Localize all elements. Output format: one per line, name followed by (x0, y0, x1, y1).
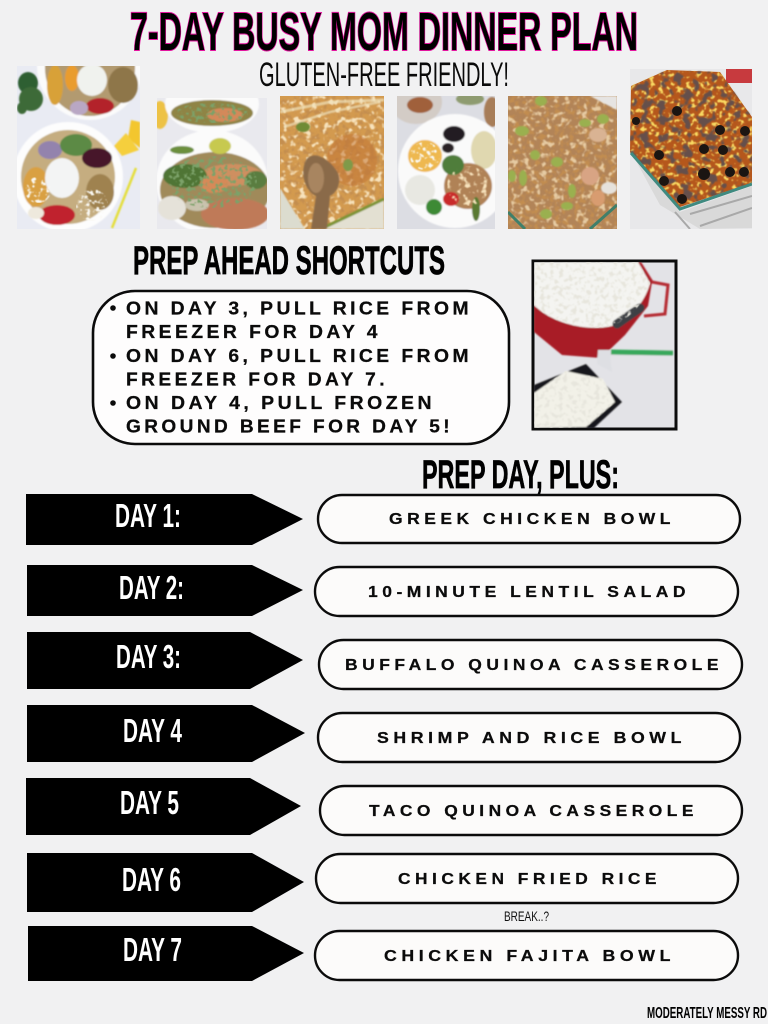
heading: prep day plus: PREP DAY, PLUS: (422, 453, 619, 497)
heading: prep ahead shortcuts: PREP AHEAD SHORTCUTS (133, 239, 445, 283)
arrow: day 4: DAY 4 (123, 712, 182, 749)
arrow: day 5 (26, 778, 301, 835)
note: break: BREAK..? (504, 908, 549, 924)
shortcut: day 4: ON DAY 4, PULL FROZEN (126, 393, 435, 413)
arrow: day 2 (27, 565, 303, 616)
shortcut: day 3: ON DAY 3, PULL RICE FROM (126, 298, 472, 318)
shortcut: day 6 (110, 346, 472, 390)
meal: day 6 (316, 854, 738, 903)
meal: day 3: BUFFALO QUINOA CASSEROLE (345, 657, 723, 674)
meal: day 7 (315, 931, 738, 980)
photo: shrimp and rice bowls (157, 98, 267, 229)
arrow: day 1 (26, 494, 303, 545)
arrow: day 5: DAY 5 (120, 784, 179, 821)
photo: buffalo quinoa casserole (280, 96, 384, 229)
arrow: day 7 (28, 926, 304, 981)
meal: day 4: SHRIMP AND RICE BOWL (377, 730, 686, 747)
photo: Greek chicken bowls (17, 66, 140, 229)
shortcut: day 6: FREEZER FOR DAY 7. (126, 370, 388, 390)
photo: taco quinoa casserole (630, 69, 752, 229)
meal: day 6: CHICKEN FRIED RICE (398, 871, 661, 888)
arrow: day 7: DAY 7 (123, 931, 182, 968)
panel: prep ahead shortcut list (93, 291, 509, 444)
meal: day 5 (320, 786, 742, 835)
meal: day 1 (318, 495, 740, 543)
shortcut: day 6: ON DAY 6, PULL RICE FROM (126, 346, 472, 366)
shortcut: day 3: FREEZER FOR DAY 4 (126, 322, 381, 342)
arrow: day 4 (27, 705, 305, 762)
photo: frozen rice in pot and tray (533, 261, 676, 429)
arrow: day 3: DAY 3: (116, 638, 181, 675)
subtitle: GLUTEN-FREE FRIENDLY! (259, 56, 509, 94)
meal: day 4 (318, 713, 740, 762)
meal: day 2: 10-MINUTE LENTIL SALAD (368, 584, 690, 601)
arrow: day 6 (27, 853, 304, 912)
shortcut: day 4 (110, 393, 453, 436)
meal: day 5: TACO QUINOA CASSEROLE (369, 803, 698, 820)
meal: day 2 (315, 567, 738, 616)
arrow: day 6: DAY 6 (122, 861, 181, 898)
arrow: day 1: DAY 1: (115, 497, 181, 534)
meal: day 1: GREEK CHICKEN BOWL (389, 511, 675, 528)
shortcut: day 3 (110, 298, 472, 342)
meal: day 3 (319, 640, 742, 689)
arrow: day 3 (27, 632, 303, 689)
photo: chicken fried rice (508, 96, 617, 229)
arrow: day 2: DAY 2: (119, 569, 184, 606)
shortcut: day 4: GROUND BEEF FOR DAY 5! (126, 416, 453, 436)
photo: chicken fajita bowl (397, 96, 495, 229)
meal: day 7: CHICKEN FAJITA BOWL (384, 948, 675, 965)
